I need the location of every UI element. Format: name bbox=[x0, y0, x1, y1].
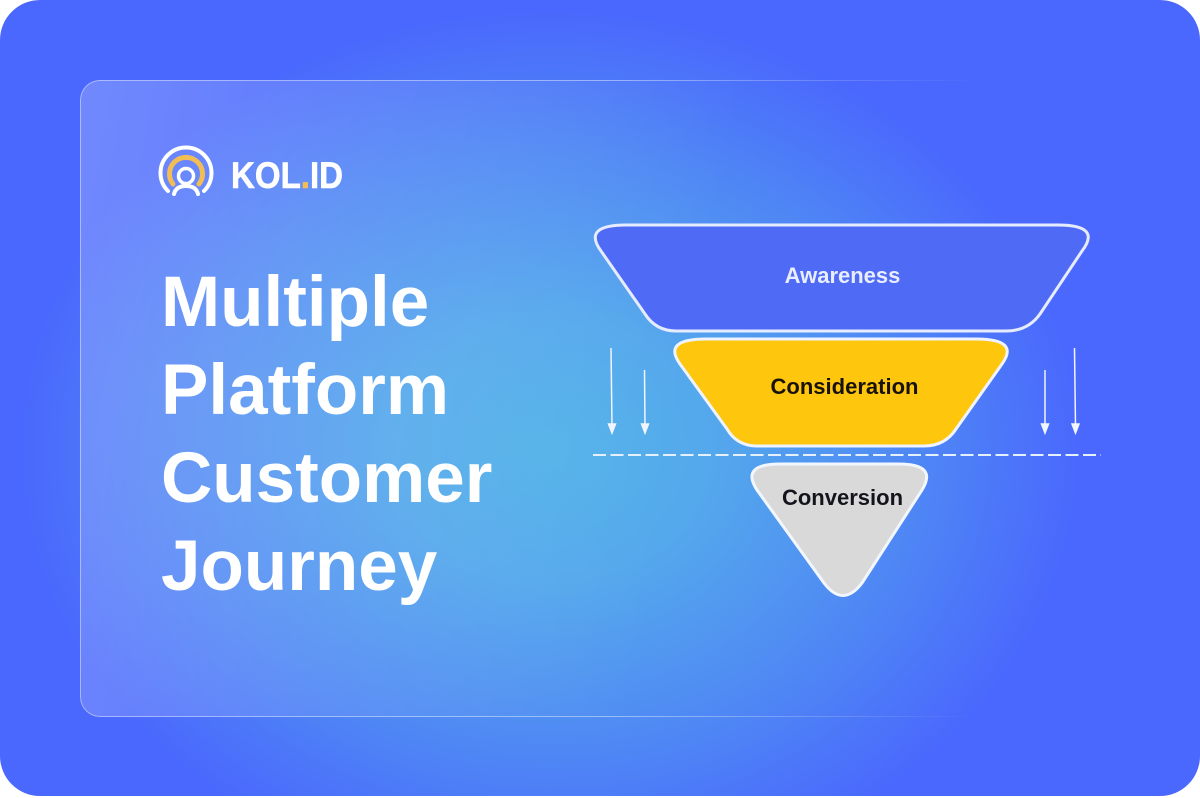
glass panel bbox=[80, 80, 1120, 717]
funnel: conversion: Conversion bbox=[782, 485, 903, 510]
title bbox=[161, 263, 492, 606]
title: Platform bbox=[161, 351, 449, 430]
arrow: outer left bbox=[608, 348, 616, 433]
arrow: inner left bbox=[642, 370, 648, 433]
funnel diagram bbox=[593, 225, 1101, 596]
title: Journey bbox=[161, 527, 437, 606]
logo: KOL.ID bbox=[161, 147, 343, 196]
arrow: outer right bbox=[1072, 348, 1079, 433]
funnel: consideration: Consideration bbox=[771, 374, 918, 399]
icon: logo signal and person bbox=[161, 147, 212, 194]
funnel: conversion bbox=[752, 464, 927, 596]
logo wordmark: KOL.ID bbox=[231, 155, 343, 196]
arrow: inner right bbox=[1042, 370, 1048, 433]
funnel: awareness: Awareness bbox=[785, 263, 900, 288]
title: Customer bbox=[161, 439, 492, 518]
title: Multiple bbox=[161, 263, 429, 342]
funnel: consideration bbox=[675, 339, 1007, 446]
dashed threshold line bbox=[593, 454, 1101, 456]
funnel: awareness bbox=[595, 225, 1088, 331]
panel border bbox=[80, 80, 980, 717]
